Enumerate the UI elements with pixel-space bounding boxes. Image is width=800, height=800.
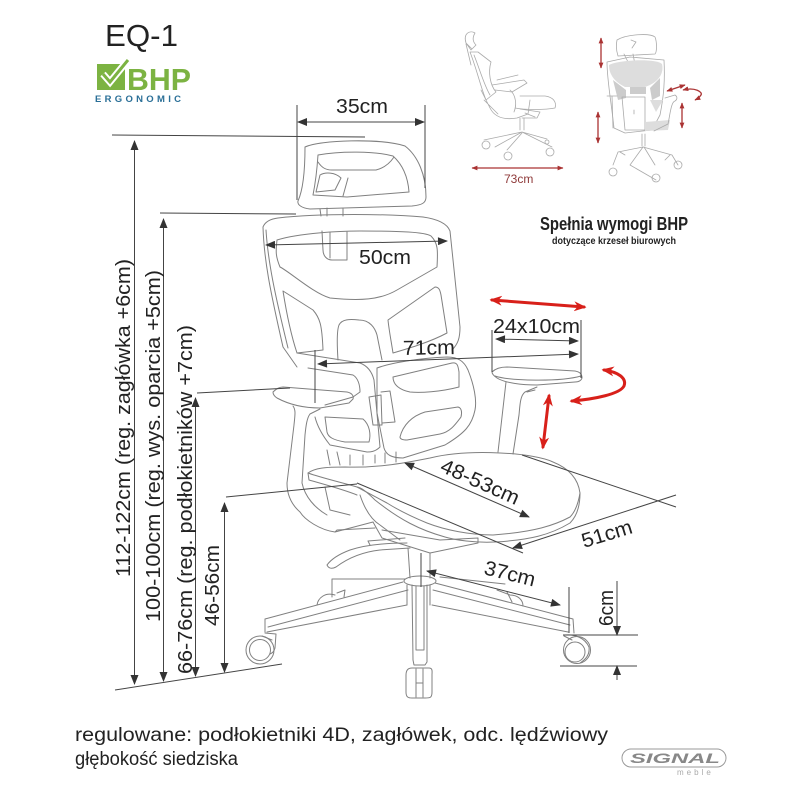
logo: Signal meble: meble <box>677 768 714 777</box>
BHP compliance note: dotyczące krzeseł biurowych <box>552 235 676 247</box>
BHP compliance note <box>540 214 688 247</box>
dimension: backrest width 50cm: 50cm <box>359 246 411 269</box>
right armrest <box>492 367 582 454</box>
red arrow: armrest slide <box>492 300 584 307</box>
dimension: headrest width 35cm <box>297 95 425 200</box>
left armrest <box>273 387 373 532</box>
chair line drawing <box>246 141 590 698</box>
dimension: armrest height <box>174 325 290 676</box>
dimension: headrest width 35cm: 35cm <box>336 95 388 118</box>
gas lift and lever <box>327 538 430 578</box>
dimension: backrest width 50cm <box>266 241 447 269</box>
dimension: base radius 37cm: 37cm <box>482 557 538 591</box>
lumbar support <box>297 353 476 465</box>
red arrow: armrest rotation <box>572 370 625 401</box>
dimension: total height <box>112 135 365 690</box>
thumbnail adjustment arrows <box>598 38 701 143</box>
logo: Signal meble: SIGNAL <box>630 751 720 766</box>
back view thumbnail chair <box>607 35 682 182</box>
headrest <box>298 141 426 216</box>
adjustments description: głębokość siedziska <box>75 749 238 770</box>
logo: BHP ergonomic: ERGONOMIC <box>95 94 181 105</box>
dimension: caster height 6cm <box>560 581 638 680</box>
BHP compliance note: Spełnia wymogi BHP <box>540 214 688 234</box>
width arrow 73cm <box>472 168 563 186</box>
logo: BHP ergonomic <box>95 60 191 105</box>
dimension: armrest height: 66-76cm (reg. podłokietników +7cm) <box>174 325 197 674</box>
backrest <box>263 214 460 367</box>
dimension: armrest span 71cm <box>315 336 578 403</box>
dimension: seat depth 48-53cm: 48-53cm <box>437 455 523 510</box>
seat <box>308 453 580 553</box>
dimension: backrest height: 100-100cm (reg. wys. oparcia +5cm) <box>142 270 165 622</box>
adjustments description: regulowane: podłokietniki 4D, zagłówek, odc. lędźwiowy <box>75 725 609 746</box>
red arrow: armrest height <box>543 396 549 447</box>
title: EQ-1 <box>105 18 178 53</box>
dimension: armrest pad 24x10cm: 24x10cm <box>493 315 580 338</box>
logo: BHP ergonomic: BHP <box>127 62 191 97</box>
dimension: armrest span 71cm: 71cm <box>403 336 455 360</box>
side view thumbnail chair <box>465 32 556 160</box>
logo: Signal meble <box>622 749 726 777</box>
casters <box>246 633 590 698</box>
width arrow 73cm: 73cm <box>504 172 533 186</box>
dimension: seat depth 48-53cm <box>405 455 529 517</box>
dimension: seat height <box>201 484 357 672</box>
dimension: seat height: 46-56cm <box>201 545 224 626</box>
dimension: total height: 112-122cm (reg. zagłówka +6cm) <box>112 259 135 577</box>
dimension: caster height 6cm: 6cm <box>595 590 618 626</box>
dimension: seat width 51cm <box>357 455 676 553</box>
five-star base <box>265 576 574 665</box>
dimension: armrest pad 24x10cm <box>492 315 581 378</box>
dimension: seat width 51cm: 51cm <box>579 516 635 553</box>
dimension: base radius 37cm <box>421 553 569 633</box>
adjustments description <box>75 725 609 770</box>
